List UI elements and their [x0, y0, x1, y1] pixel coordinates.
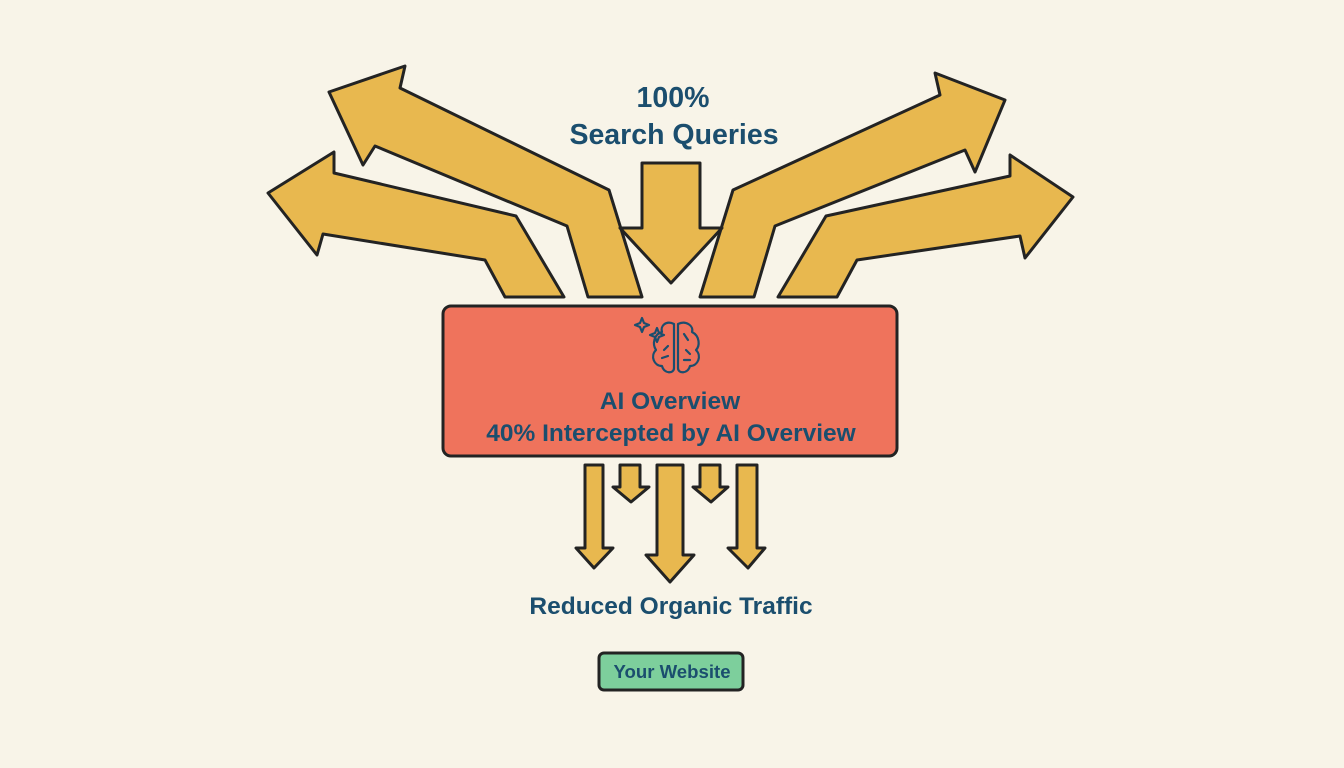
arrows: remaining organic traffic: [576, 465, 765, 582]
button: your website: [599, 653, 743, 690]
arrow: left small: [268, 152, 564, 297]
AI overview box: [443, 306, 897, 456]
button: your website: Your Website: [613, 661, 731, 682]
arrows: outgoing diverted traffic: [268, 66, 1073, 297]
arrow: right small: [778, 155, 1073, 297]
title: [569, 82, 779, 151]
arrow: center down: [620, 163, 722, 283]
arrow: left big: [329, 66, 642, 297]
arrow: right big: [700, 73, 1005, 297]
text: AI overview label: AI Overview: [600, 388, 741, 415]
text: reduced organic traffic: Reduced Organic Traffic: [529, 593, 813, 620]
text: AI overview label: [486, 388, 857, 447]
title: 100%: [637, 82, 709, 114]
text: AI overview label: 40% Intercepted by AI Overview: [486, 420, 857, 447]
icon: brain with sparkles: [635, 318, 699, 372]
title: Search Queries: [569, 119, 779, 151]
